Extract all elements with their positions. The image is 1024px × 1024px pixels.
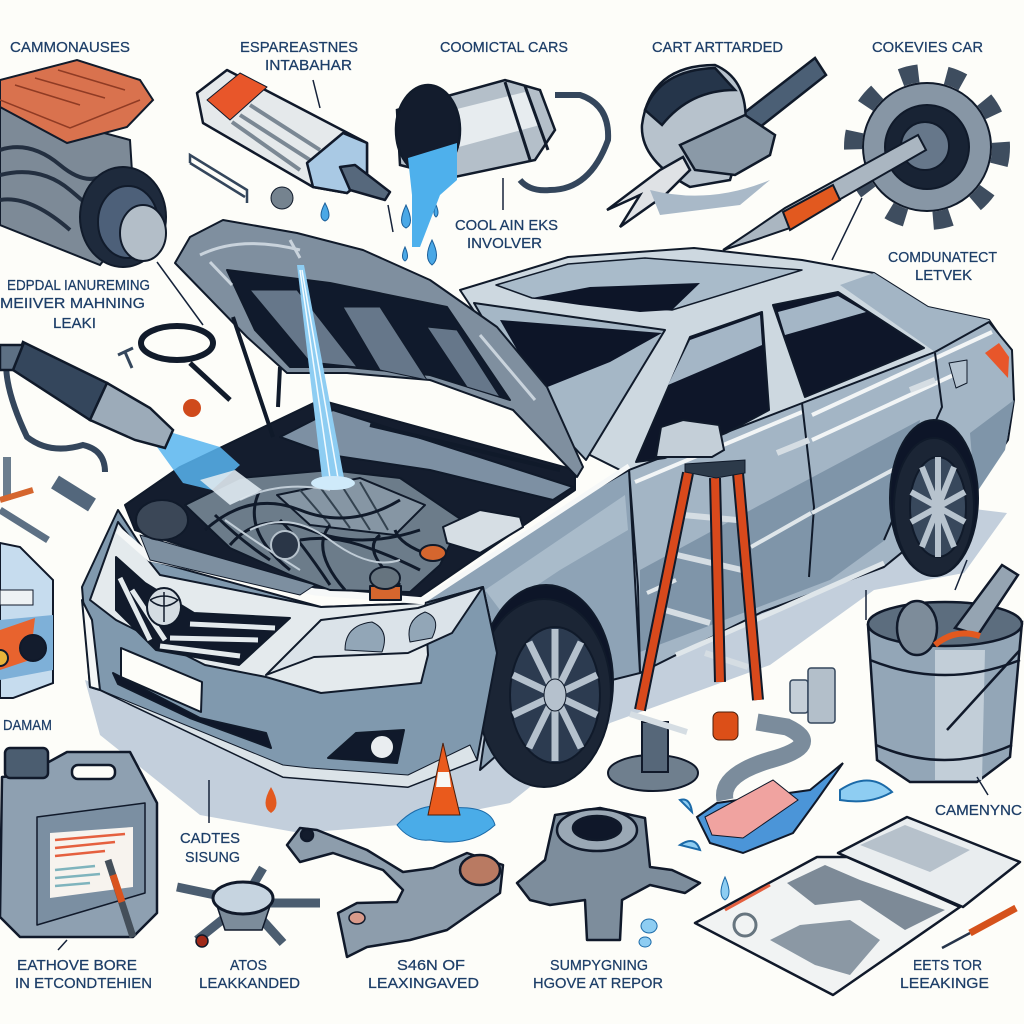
pulley ring: [98, 186, 158, 258]
headlight lenses: [345, 612, 436, 652]
circle diagram: [734, 914, 756, 936]
arm socket: [301, 829, 313, 841]
gear body: [863, 83, 991, 211]
gear: [723, 73, 1001, 250]
label: leaxingaved: LEAXINGAVED: [368, 975, 479, 992]
left wrench: [0, 457, 48, 540]
rear wheel arch: [890, 420, 978, 576]
label: in etcondtehien: IN ETCONDTEHIEN: [15, 975, 152, 992]
arm pink bushing: [349, 912, 365, 924]
left bumper edge: [82, 600, 100, 690]
sealant tube: [197, 70, 390, 200]
ladder legs outline: [640, 473, 758, 710]
droplets: [639, 877, 729, 947]
hood panel 1: [250, 290, 357, 367]
grille slats: [120, 578, 275, 656]
hood inner recess: [227, 270, 510, 400]
small jars: [790, 668, 835, 723]
hose origin: [0, 345, 23, 370]
coolant jug: [0, 748, 157, 937]
hose ribs: [645, 68, 735, 125]
hose and wrench: [607, 58, 826, 227]
wiper: [370, 425, 560, 470]
label: cadtes: CADTES: [180, 830, 240, 847]
car: [82, 220, 1014, 787]
jug label: [50, 827, 133, 898]
intake manifold: [277, 478, 425, 535]
label: damam: DAMAM: [3, 717, 52, 734]
screwdriver: [942, 908, 1016, 948]
label: camenync: CAMENYNC: [935, 802, 1022, 819]
front spokes: [513, 629, 597, 761]
jack post: [642, 722, 668, 772]
control arm: [287, 828, 503, 957]
clamp: [680, 115, 775, 175]
orange handle: [0, 490, 33, 500]
pump opening: [573, 816, 621, 840]
dipstick: [108, 860, 133, 937]
body darker band: [640, 420, 920, 652]
funnel highlight: [445, 92, 540, 148]
left hose nozzle: [0, 342, 173, 472]
rear door window: [773, 292, 924, 397]
engine pipes: [205, 490, 430, 590]
toyota badge: [147, 588, 181, 626]
tube text: [232, 105, 320, 170]
tube end: [307, 133, 367, 193]
pliers: [607, 157, 690, 227]
bent hose: [725, 722, 803, 800]
hood panel 3: [427, 327, 500, 397]
water drops: [321, 203, 438, 265]
bracket dome: [215, 900, 272, 930]
tube label orange: [207, 73, 267, 120]
pulley: [80, 167, 166, 267]
oil cap top: [370, 567, 400, 589]
corrugated hose: [642, 65, 746, 187]
pulley: [271, 531, 299, 559]
label: hgove: HGOVE AT REPOR: [533, 975, 663, 992]
front hub: [544, 679, 566, 711]
ladder legs: [640, 473, 758, 710]
right page text: [860, 825, 970, 872]
jet pool: [311, 476, 355, 490]
label: sign of: S46N OF: [397, 957, 465, 974]
intake strip: [140, 535, 315, 595]
sunroof dark glass: [532, 283, 700, 312]
water splash: [680, 780, 892, 850]
engine cover: [0, 60, 153, 143]
orange ball: [183, 399, 201, 417]
spider bracket part: [177, 868, 320, 947]
pump top: [557, 809, 637, 851]
screwdriver grip: [970, 908, 1016, 933]
bucket round part: [897, 601, 937, 655]
magnifier tool: [141, 326, 230, 400]
bucket sheen: [935, 650, 985, 780]
bottle dial: [20, 635, 46, 661]
engine pipes: [0, 147, 110, 230]
wrench arm: [0, 510, 48, 540]
label: eets tor: EETS TOR: [913, 957, 982, 974]
label: sumpygning: SUMPYGNING: [550, 957, 648, 974]
lower air intake: [113, 673, 271, 748]
label text teal: [55, 866, 100, 886]
label: atos: ATOS: [230, 957, 267, 974]
gear hub: [901, 122, 949, 170]
sill: [676, 563, 884, 655]
label: cammonauses: CAMMONAUSES: [10, 39, 130, 56]
rear fender shade: [970, 400, 1014, 495]
bottle graphic: [0, 615, 53, 680]
front rim: [510, 627, 600, 763]
jack handle: [630, 714, 687, 732]
rear window reflection: [778, 296, 866, 335]
front fender: [418, 470, 640, 770]
front bumper: [82, 510, 497, 787]
bumper white upper: [90, 522, 428, 693]
hose steel: [90, 383, 173, 448]
magnifier handle: [190, 363, 230, 400]
rear rim: [910, 457, 966, 557]
manifold ribs: [300, 482, 388, 530]
label: intabahar: INTABAHAR: [265, 57, 352, 74]
bucket handle: [947, 650, 1020, 730]
hood panel 2: [343, 307, 427, 380]
hanging cable: [6, 350, 105, 472]
jug cap: [5, 748, 48, 778]
label: esparestnes: ESPAREASTNES: [240, 39, 358, 56]
bucket rim: [868, 602, 1022, 646]
arm orange bushing: [460, 855, 500, 885]
jug handle hole: [72, 765, 115, 779]
open hood: [175, 220, 583, 477]
label: cokevies: COKEVIES CAR: [872, 39, 983, 56]
cone stripe: [436, 772, 451, 787]
ground shadow: [85, 500, 1007, 833]
label: cool air: COOL AIN EKS: [455, 217, 558, 234]
rear wheel: [894, 438, 974, 576]
coolant bottle left: [0, 543, 53, 698]
jar 2: [808, 668, 835, 723]
bracket red cup: [196, 935, 208, 947]
spray mist: [200, 470, 262, 505]
badge mark: [150, 592, 178, 622]
traffic cone: [397, 743, 495, 842]
gear lever: [723, 135, 926, 250]
jug inset: [37, 803, 145, 925]
engine lower: [0, 105, 135, 265]
spray from hose: [157, 430, 262, 505]
water jet from hood: [297, 265, 355, 490]
sunroof: [496, 258, 802, 310]
fog lamp lens: [370, 735, 394, 759]
door seams: [629, 353, 942, 673]
leader line: [58, 780, 209, 950]
label: leakkanded: LEAKKANDED: [199, 975, 300, 992]
bucket wrench: [955, 565, 1018, 635]
fuel door: [949, 360, 967, 388]
headlight: [266, 587, 483, 675]
leader lines bucket: [866, 560, 988, 795]
fog lamp housing: [328, 730, 404, 763]
cover ribs: [0, 70, 140, 128]
repair manual: [695, 817, 1020, 995]
bucket: [868, 565, 1022, 782]
ladder top: [685, 460, 745, 478]
shadow: [650, 180, 770, 215]
hood struts: [233, 317, 280, 437]
side moldings: [647, 465, 902, 593]
leader line: [157, 262, 203, 325]
bottle top label: [0, 590, 33, 605]
main diagram: [787, 865, 945, 930]
belt line highlights: [635, 332, 992, 482]
hose: [520, 95, 608, 190]
engine bay: [125, 400, 575, 600]
door handles: [777, 380, 935, 453]
yellow dial: [0, 650, 8, 666]
top left engine: [0, 60, 166, 267]
leader lines top: [313, 80, 862, 260]
lever orange grip: [783, 185, 840, 230]
ribbed hose: [13, 342, 107, 420]
label: eathove: EATHOVE BORE: [17, 957, 137, 974]
label: leakinge: LEEAKINGE: [900, 975, 989, 992]
windshield: [474, 303, 665, 460]
label: sisung: SISUNG: [185, 849, 240, 866]
small cap: [271, 187, 293, 209]
lower diagram: [770, 920, 880, 975]
bumper lower lip: [100, 690, 477, 787]
front wheel arch: [479, 585, 613, 779]
windshield dark glass: [500, 320, 662, 390]
label: involver: INVOLVER: [467, 235, 542, 252]
fender highlight: [485, 495, 628, 610]
orange plug: [713, 712, 738, 740]
bracket ring: [213, 882, 273, 914]
air filter in water: [680, 763, 892, 853]
rear spokes: [911, 457, 965, 557]
bucket orange part: [935, 633, 980, 645]
rear roof shade: [840, 273, 1005, 352]
white front hood lip: [118, 530, 425, 601]
tail light: [985, 343, 1009, 378]
radiator hose ribs: [136, 500, 188, 540]
stand jack: [608, 714, 698, 791]
label: meiiver: MEIIVER MAHNING: [0, 295, 145, 312]
license plate: [121, 648, 202, 712]
label text: [55, 834, 125, 856]
pouring water: [408, 143, 457, 247]
pulley cap: [120, 205, 166, 261]
nozzle: [340, 165, 390, 200]
funnel opening: [396, 85, 460, 175]
engine block: [185, 470, 462, 592]
grille: [116, 557, 290, 665]
wrench handle: [735, 58, 826, 135]
right page: [838, 817, 1020, 907]
steps: [665, 515, 748, 667]
cone body: [428, 743, 460, 815]
side mirror: [656, 420, 724, 457]
metal funnel: [396, 80, 608, 247]
roof and cabin: [460, 248, 1010, 480]
gear inner ring: [885, 105, 969, 189]
dipstick band: [113, 875, 122, 902]
engine highlights: [225, 487, 400, 570]
hood frame details: [200, 240, 535, 400]
front wheel: [477, 599, 611, 787]
small clip: [118, 348, 133, 368]
cowl strip: [280, 410, 573, 500]
lower body side: [590, 322, 1014, 673]
filter pad: [705, 780, 798, 838]
orange cap: [420, 545, 446, 561]
bracket: [190, 155, 247, 203]
coolant reservoir: [443, 510, 523, 553]
label: comdunatect: COMDUNATECT: [888, 249, 997, 266]
front window reflection: [668, 315, 762, 385]
label: commercial cars: COOMICTAL CARS: [440, 39, 568, 56]
funnel bands: [505, 82, 548, 160]
water pump housing: [517, 808, 700, 940]
small cylinder: [55, 482, 92, 505]
oil cap: [370, 567, 401, 600]
stepladder: [640, 460, 758, 710]
orange swoosh: [0, 618, 35, 670]
red label lines: [725, 885, 770, 910]
jet streaks: [300, 270, 338, 478]
label: cart: CART ARTTARDED: [652, 39, 783, 56]
fender top white edge: [420, 466, 629, 603]
bucket bands: [870, 660, 1020, 760]
front door window: [636, 312, 769, 462]
label: letvek: LETVEK: [915, 267, 972, 284]
orange oil drop: [266, 787, 276, 813]
label: leak: LEAKI: [53, 315, 96, 332]
label: edpdal: EDPDAL IANUREMING: [7, 277, 150, 294]
